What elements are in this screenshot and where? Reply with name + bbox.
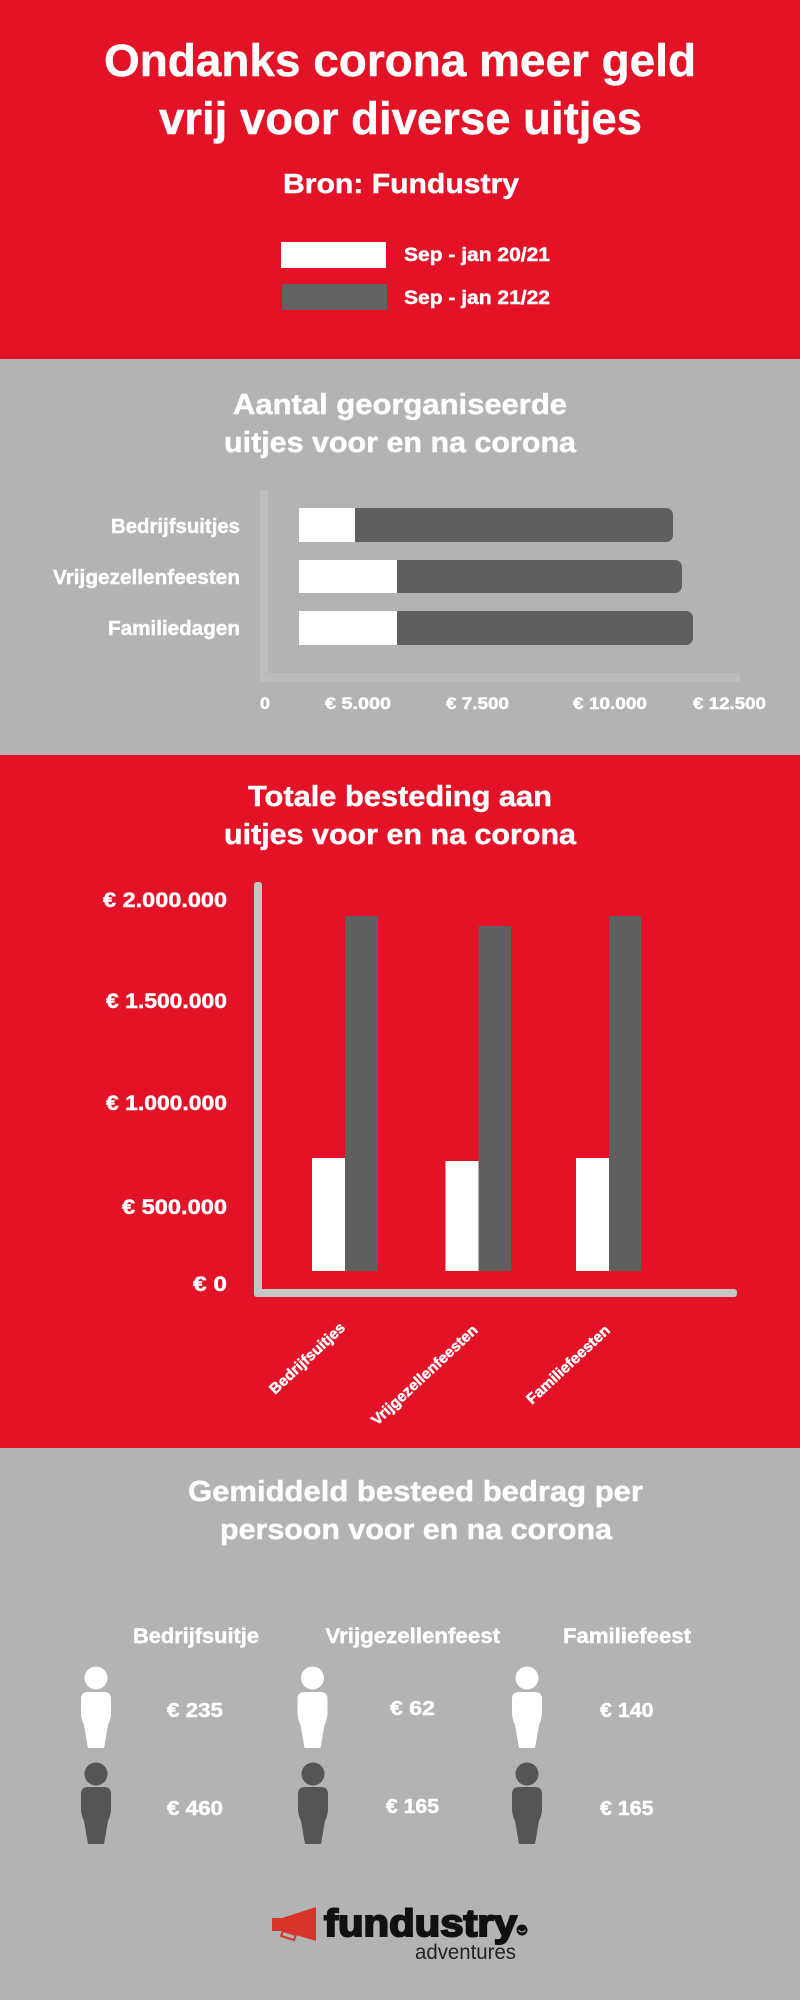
tagline: adventures (415, 1941, 516, 1964)
y axis labels: € 2.000.000 (103, 889, 227, 912)
amounts per person: € 62 (390, 1698, 435, 1720)
panel: gemiddeld besteed bedrag (0, 1448, 800, 2000)
icon: person white, Vrijgezellenfeest (298, 1666, 328, 1748)
bar: Familiedagen (108, 611, 693, 645)
y axis labels: € 1.500.000 (106, 990, 227, 1013)
y axis labels (103, 889, 227, 1296)
heading: Totale besteding aan (248, 781, 552, 813)
heading: persoon voor en na corona (220, 1514, 613, 1546)
heading: Aantal georganiseerde (233, 389, 567, 421)
icon: person dark, Bedrijfsuitje (81, 1762, 111, 1844)
amounts per person: € 165 (386, 1796, 439, 1818)
amounts per person: € 140 (600, 1700, 654, 1722)
columns: Familiefeesten (576, 916, 641, 1271)
wordmark: fundustry (324, 1903, 517, 1945)
amounts per person: € 165 (600, 1798, 654, 1820)
icon: logo dot (516, 1924, 528, 1936)
columns: Vrijgezellenfeesten (446, 926, 511, 1271)
logo: fundustry adventures (272, 1903, 528, 1964)
icon: person dark, Familiefeest (512, 1762, 542, 1844)
panel: header (0, 0, 800, 359)
x axis labels: € 12.500 (693, 694, 766, 713)
columns: Bedrijfsuitjes (312, 916, 378, 1271)
panel: aantal georganiseerde uitjes (0, 359, 800, 755)
column labels: Familiefeest (563, 1625, 691, 1648)
column labels: Bedrijfsuitje (133, 1625, 259, 1648)
panel: totale besteding (0, 755, 800, 1448)
column labels: Vrijgezellenfeest (326, 1625, 500, 1648)
y axis labels: € 500.000 (122, 1196, 227, 1219)
icon: person dark, Vrijgezellenfeest (298, 1762, 328, 1844)
y axis labels: € 1.000.000 (106, 1092, 227, 1115)
title: vrij voor diverse uitjes (159, 93, 642, 144)
x axis labels: € 10.000 (573, 694, 647, 713)
legend: Sep - jan 20/21 (404, 245, 550, 266)
y axis labels: € 0 (193, 1273, 227, 1296)
amounts per person: € 460 (167, 1798, 223, 1820)
heading (224, 781, 577, 851)
icon: megaphone (272, 1907, 316, 1941)
rotated category labels: Vrijgezellenfeesten (368, 1322, 481, 1429)
bar: Familiedagen: Familiedagen (108, 618, 240, 640)
legend: Sep - jan 21/22 (404, 288, 550, 309)
bar: Bedrijfsuitjes (111, 508, 673, 542)
bar: Vrijgezellenfeesten: Vrijgezellenfeesten (53, 567, 240, 589)
heading (224, 389, 577, 459)
heading: Gemiddeld besteed bedrag per (188, 1476, 643, 1508)
x axis labels: 0 (260, 694, 270, 713)
heading (188, 1476, 643, 1546)
amounts per person (167, 1698, 654, 1820)
amounts per person: € 235 (167, 1700, 223, 1722)
rotated category labels (266, 1319, 614, 1429)
source line: Bron: Fundustry (283, 168, 519, 199)
icon: person white, Familiefeest (512, 1666, 542, 1748)
x axis labels: € 7.500 (446, 694, 509, 713)
x axis labels (260, 694, 766, 713)
column labels (133, 1625, 691, 1648)
horizontal bar chart (53, 490, 766, 713)
x axis labels: € 5.000 (325, 694, 391, 713)
title: Ondanks corona meer geld (104, 35, 696, 86)
icon: person white, Bedrijfsuitje (81, 1666, 111, 1748)
heading: uitjes voor en na corona (224, 819, 577, 851)
rotated category labels: Familiefeesten (523, 1322, 614, 1408)
legend (281, 242, 550, 310)
bar: Bedrijfsuitjes: Bedrijfsuitjes (111, 516, 240, 538)
rotated category labels: Bedrijfsuitjes (266, 1319, 349, 1398)
bar: Vrijgezellenfeesten (53, 560, 682, 593)
column chart (103, 882, 737, 1429)
title (104, 35, 696, 144)
heading: uitjes voor en na corona (224, 427, 577, 459)
